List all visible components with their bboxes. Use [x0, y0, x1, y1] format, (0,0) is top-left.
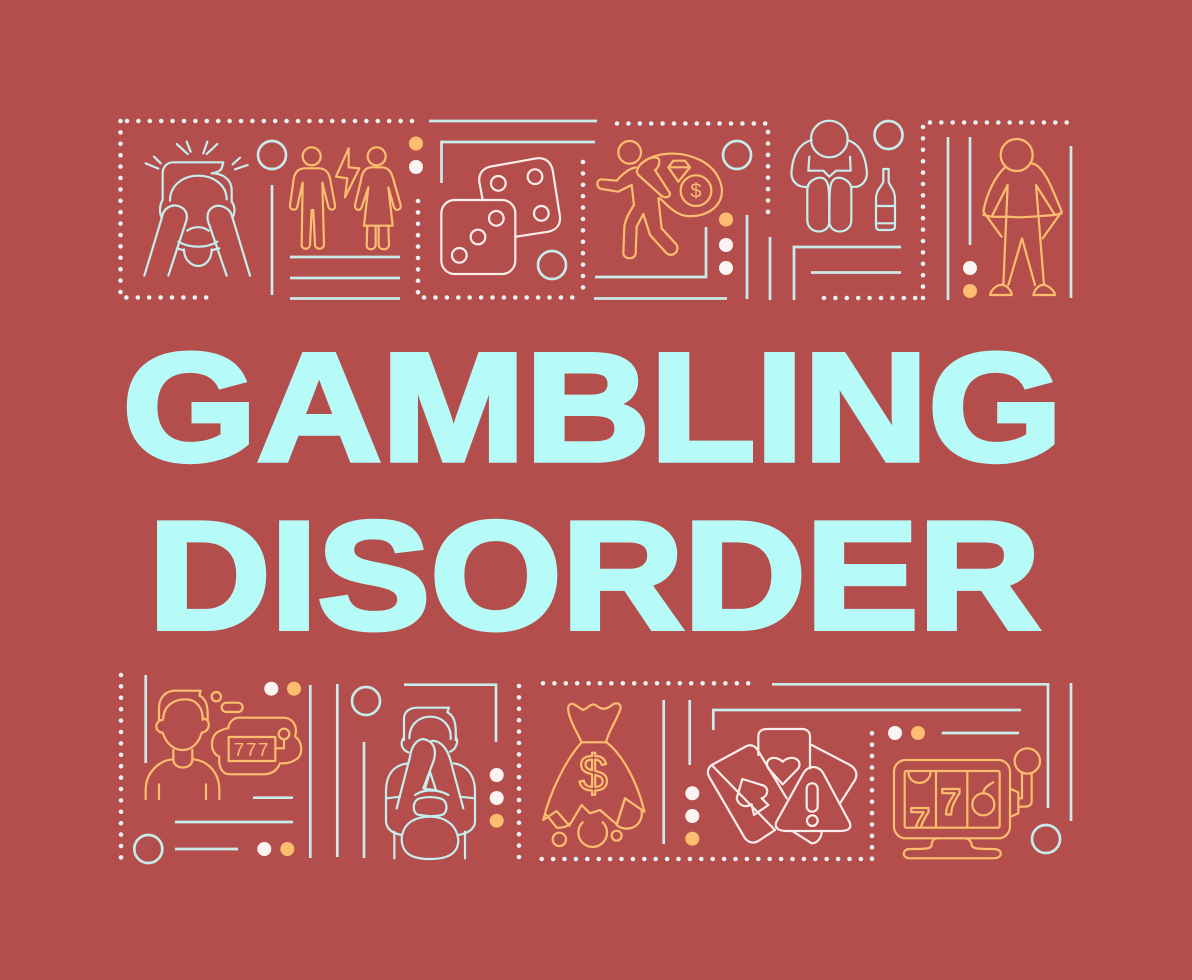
icon: person with head in hands	[386, 708, 475, 859]
icon: man running with money sack	[597, 141, 722, 258]
icon: man covering his eyes	[144, 142, 250, 276]
icon: broke man with empty pockets	[983, 139, 1062, 295]
icon: dice	[441, 158, 560, 274]
icon: slot machine: 7	[941, 781, 961, 822]
icon: slot machine: 7	[910, 800, 930, 841]
icon: torn money bag	[543, 703, 644, 847]
icon: man running with money sack: $	[690, 180, 702, 202]
title: DISORDER	[148, 490, 1040, 662]
bottom row frames and lines	[121, 675, 1071, 863]
infographic canvas	[118, 118, 1072, 864]
top row frames and lines	[120, 121, 1072, 300]
title	[122, 321, 1062, 662]
icon: playing cards with warning sign	[708, 729, 856, 843]
icon: slot machine	[894, 748, 1040, 858]
icon: man dreaming of slot machine: 777	[234, 739, 270, 760]
icon: quarrelling couple	[290, 147, 401, 249]
icon: bottle	[876, 169, 895, 230]
icon: sitting depressed person	[791, 121, 867, 231]
title: GAMBLING	[122, 321, 1062, 493]
icon: torn money bag: $	[579, 744, 608, 802]
icon: man dreaming of slot machine	[146, 691, 301, 799]
